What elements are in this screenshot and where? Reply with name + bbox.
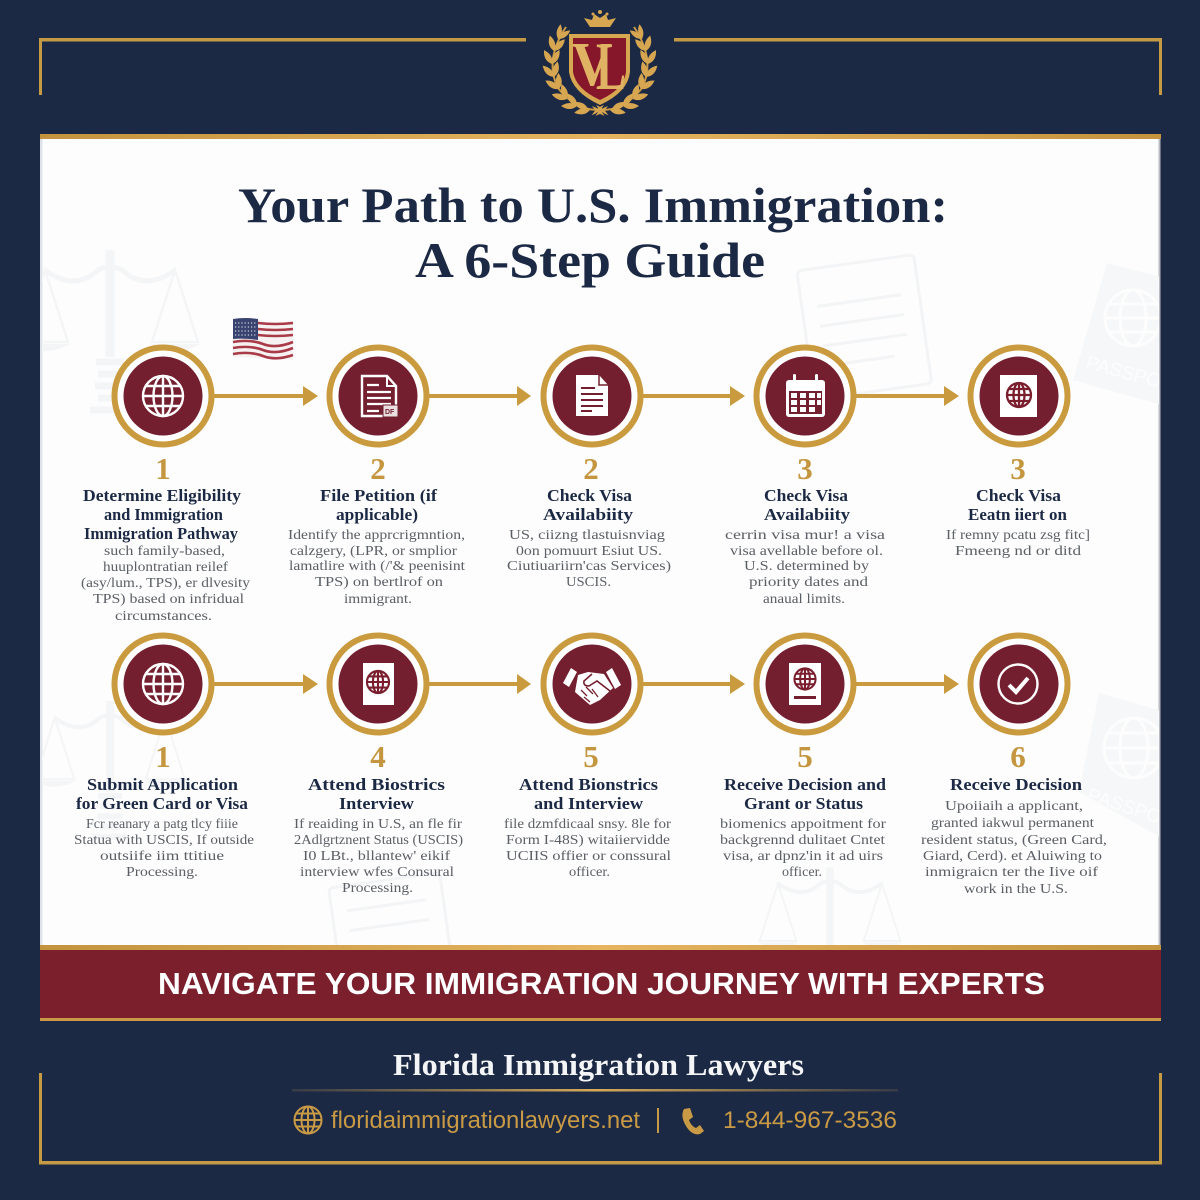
step description: inmigraicn ter the Iive oif [925,865,1098,880]
arrows: bottom row [214,674,959,694]
step number: 4 [370,739,386,774]
step: attend biometrics interview [294,636,463,896]
step description: interview wfes Consural [300,865,454,880]
step description: USCIS. [566,575,611,590]
step number: 1 [155,451,171,486]
panel top gold rule [40,134,1161,139]
icon: globe [143,664,183,704]
panel: main white content area [40,134,1160,950]
step description: visa avellable before ol. [730,544,883,559]
website: floridaimmigrationlawyers.net [331,1107,640,1134]
step description: TPS) on bertlrof on [315,575,443,590]
step description: cerrin visa mur! a visa [725,528,886,543]
step number: 2 [370,451,386,486]
step description: 2Adlgrtznent Status (USCIS) [294,833,463,848]
step heading [764,486,851,524]
icon: handshake [563,668,621,705]
banner: call to action: NAVIGATE YOUR IMMIGRATION JOURNEY WITH EXPERTS [158,966,1045,1001]
step heading [83,486,242,543]
icon: document with stamp [362,376,398,417]
watermark: scales, documents and passports background: PASSPORT [1084,353,1188,399]
step description: Identify the apprcrigmntion, [288,528,465,543]
top frame lines [39,38,1162,95]
step description: circumstances. [115,609,212,624]
step heading: File Petition (if [320,486,438,505]
step: check visa dates [725,348,886,607]
step description: Giard, Cerd). et Aluiwing to [923,849,1102,864]
step description: file dzmfdicaal snsy. 8le for [504,817,671,832]
step number: 5 [583,739,599,774]
step description: I0 LBt., bllantew' eikif [303,849,450,864]
step: determine eligibility [81,348,250,624]
step heading: Receive Decision [950,775,1082,794]
step description [507,528,671,590]
logo: crest with crown, wreath and VL monogram [541,10,659,117]
step description: outsiife iim ttitiue [100,849,224,864]
step description: Processing. [126,865,198,880]
step heading [320,486,438,524]
step: check visa availability [507,348,671,590]
step description [720,817,886,880]
step number: 3 [1010,451,1026,486]
title: Your Path to U.S. Immigration: [238,177,948,233]
step description: Fmeeng nd or ditd [955,544,1081,559]
step description: anaual limits. [763,592,845,607]
step heading: Submit Application [87,775,238,794]
step heading: Receive Decision and [724,775,886,794]
step heading: and Immigration [104,505,223,524]
icon: American flag [233,318,293,360]
step heading: Attend Bionstrics [519,775,659,794]
footer firm name: Florida Immigration Lawyers [393,1047,804,1082]
panel side edges [40,139,1160,945]
step: file petition [288,348,465,607]
step description: Statua with USCIS, If outside [74,833,254,848]
phone number: 1-844-967-3536 [723,1107,897,1134]
step heading [76,775,248,813]
step description [288,528,465,607]
step description: Processing. [342,881,413,896]
step description: Form I-48S) witaiiervidde [506,833,670,848]
step description: resident status, (Green Card, [921,833,1107,848]
step description: backgrennd dulitaet Cntet [720,833,885,848]
step description: calzgery, (LPR, or smplior [290,544,457,559]
step heading [968,486,1067,524]
step description [921,799,1107,897]
step description [946,528,1090,559]
icon: check mark in circle [998,664,1038,704]
icon: shield [569,34,630,105]
step heading: applicable) [336,505,418,524]
step heading [519,775,659,813]
step heading [543,486,634,524]
step number: 2 [583,451,599,486]
title: A 6-Step Guide [415,232,765,288]
icon: web globe [294,1106,322,1134]
icon: document [576,375,608,416]
step description: granted iakwul permanent [931,816,1094,831]
watermark: scales, documents and passports background [42,250,1159,945]
step: receive decision [921,636,1107,897]
step description: huuplontratian reilef [103,560,228,575]
step description: such family-based, [104,544,225,559]
bottom frame lines [39,1073,1162,1164]
step description: officer. [569,865,610,880]
step description: biomenics appoitment for [720,817,886,832]
step description [504,817,671,880]
icon: passport [363,663,394,705]
step description: U.S. determined by [744,559,869,574]
icon: passport with bar [789,663,821,705]
step description: Ciutiuariirn'cas Services) [507,559,671,574]
step description: Upoiiaih a applicant, [945,799,1083,814]
step heading: Grant or Status [744,794,864,813]
title [238,177,948,288]
step description: officer. [782,865,822,880]
step description: Fcr reanary a patg tlcy fiiie [86,817,238,832]
step number: 1 [155,739,171,774]
step description: priority dates and [749,575,868,590]
watermark: scales, documents and passports background: PASSPORT [1084,785,1188,836]
step heading: Check Visa [547,486,632,505]
step description: visa, ar dpnz'in it ad uirs [723,849,883,864]
banner: call to action [40,945,1161,1021]
step heading: and Interview [534,794,643,813]
step description: immigrant. [344,592,412,607]
step description: UCIIS offier or conssural [506,849,671,864]
step: receive decision and grant [720,636,886,880]
step description [725,528,886,607]
icon: passport [1000,375,1037,417]
step heading: Immigration Pathway [84,524,239,543]
arrows: top row [214,386,959,406]
monogram L: L [596,28,626,104]
step number: 3 [797,451,813,486]
step heading: Eeatn iiert on [968,505,1067,524]
step description: US, ciizng tlastuisnviag [509,528,665,543]
step heading [724,775,886,813]
icon: calendar [786,374,825,417]
footer contact line [294,1106,897,1134]
separator [657,1108,659,1133]
step heading: Determine Eligibility [83,486,242,505]
step description: (asy/lum., TPS), er dlvesity [81,576,250,591]
step: attend biometrics and interview [504,636,671,880]
step heading: Attend Biostrics [308,775,446,794]
step description: If reaiding in U.S, an fle fir [294,817,462,832]
icon: globe [143,376,183,416]
monogram V: V [572,31,612,99]
step description [81,544,250,624]
step description: TPS) based on infridual [93,592,244,607]
step description [74,817,254,880]
step heading: Availabiity [543,505,634,524]
step heading: Check Visa [976,486,1061,505]
step description: work in the U.S. [964,882,1068,897]
step heading: Interview [339,794,414,813]
icon: crown [584,10,616,27]
step description: If remny pcatu zsg fitc] [946,528,1090,543]
step heading: Check Visa [764,486,848,505]
step number: 5 [797,739,813,774]
step heading: for Green Card or Visa [76,794,248,813]
icon: phone [682,1108,704,1134]
icon: document with stamp: DF [385,409,395,416]
step heading: Availabiity [764,505,851,524]
step description: lamatlire with (/'& peenisint [289,559,465,574]
step description [294,817,463,896]
step number: 6 [1010,739,1026,774]
step: submit application [74,636,254,880]
step: check visa passport [946,348,1090,559]
step description: 0on pomuurt Esiut US. [516,544,662,559]
step heading [308,775,446,813]
